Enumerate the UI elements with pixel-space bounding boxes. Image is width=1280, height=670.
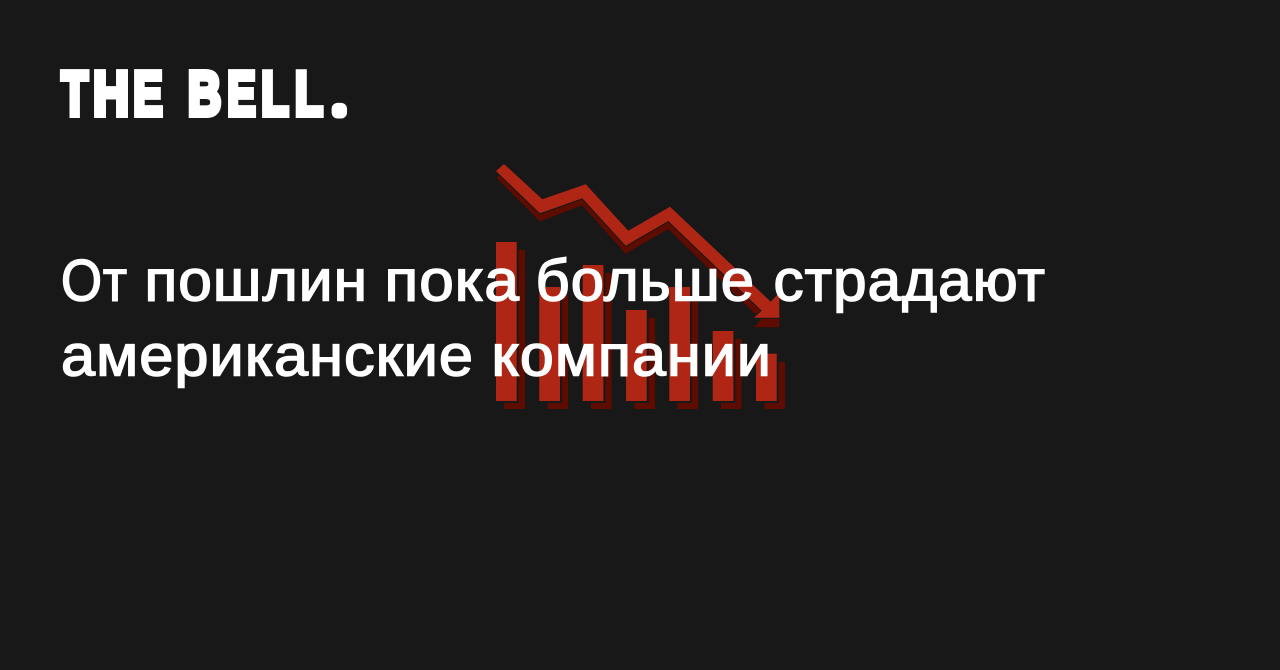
title [61, 248, 1046, 388]
bars [496, 242, 777, 401]
title: пошлин [144, 248, 368, 314]
logo: THE BELL.: L [295, 59, 323, 129]
title: страдают [774, 248, 1046, 314]
bar shadows [504, 250, 785, 409]
logo: THE BELL.: E [133, 60, 163, 129]
title: пока [384, 248, 520, 314]
logo: THE BELL.: B [188, 59, 221, 129]
logo: THE BELL.: H [93, 59, 129, 128]
arrow shadow [496, 171, 779, 327]
title: больше [536, 248, 755, 314]
title: американские [61, 324, 474, 388]
logo: THE BELL.: . [336, 92, 343, 119]
arrow [496, 164, 779, 318]
logo: THE BELL.: T [62, 60, 88, 129]
logo: THE BELL.: E [227, 60, 256, 129]
icon: falling chart with arrow [496, 164, 785, 409]
logo: THE BELL.: L [261, 60, 289, 129]
title: От [61, 248, 128, 314]
logo: THE BELL. [62, 59, 343, 129]
title: компании [492, 324, 772, 388]
